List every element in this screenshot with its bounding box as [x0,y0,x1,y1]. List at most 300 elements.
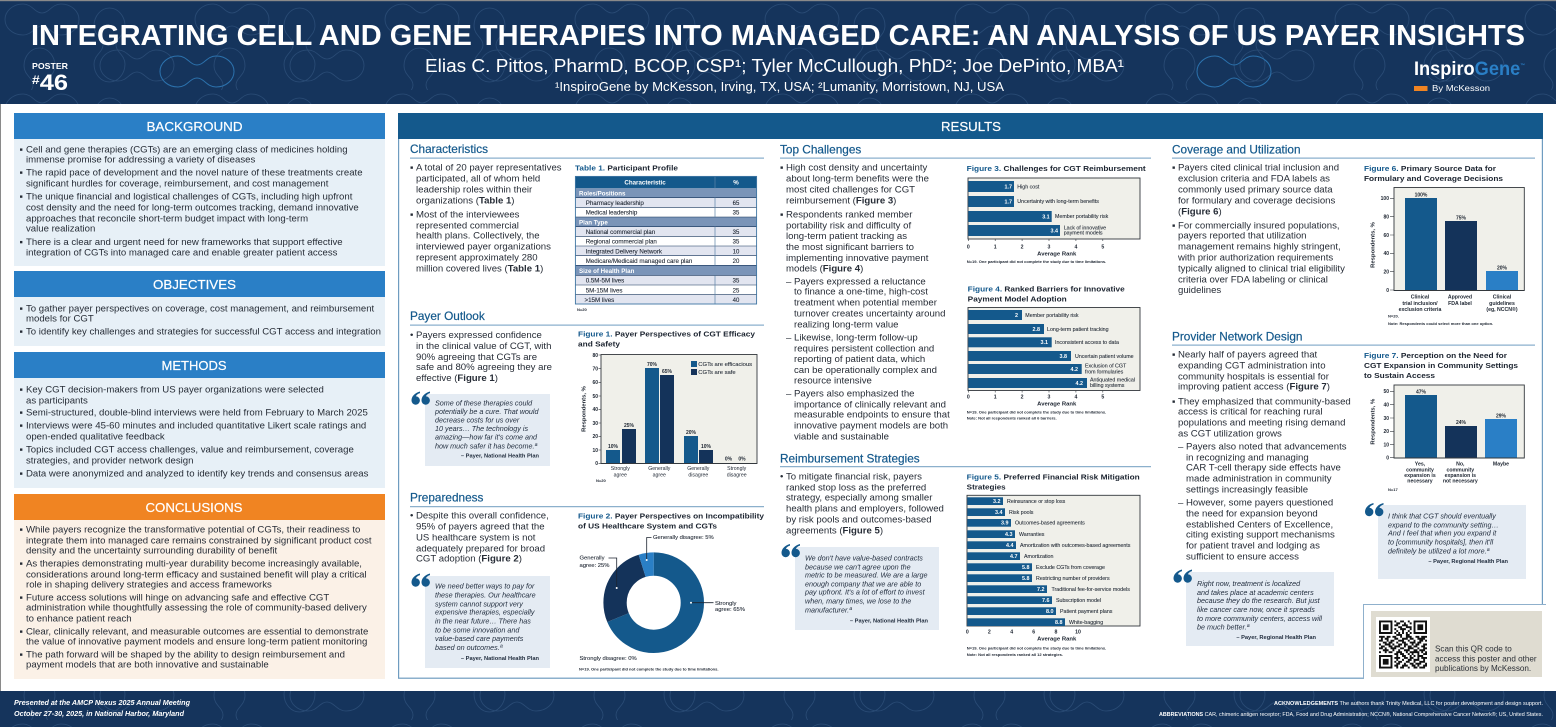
acknowledgements and abbreviations: ACKNOWLEDGEMENTS The authors thank Trinity Medical, LLC for poster development and design support. [1274,701,1543,707]
methods text: ▪ [20,469,23,480]
figure 4: barriers bar chart: 2.8 [1032,327,1040,333]
figure 5: risk mitigation bar chart: Average Rank [1037,637,1077,643]
section: top challenges: Top Challenges [780,142,861,156]
top challenges text: Payers also emphasized the [794,389,915,400]
quote: preparedness: value-based care payments [435,634,524,643]
background text: Cell and gene therapies (CGTs) are an emerging class of medicines holding [26,145,348,156]
section: payer outlook: Payer Outlook [410,309,485,323]
logo: InspiroGene by McKesson: By McKesson [1432,83,1490,93]
table 1: participant profile: 35 [733,230,740,236]
coverage text: (Figure 6) [1178,207,1222,218]
quote: provider network left: because they do the research. But just [1197,596,1321,605]
figure 4: barriers bar chart: 1 [994,395,997,401]
provider network text: They emphasized that community-based [1178,397,1351,408]
figure 4: barriers bar chart: 4 [1074,395,1077,401]
figure 4: barriers bar chart: Exclusion of CGT [1085,364,1127,370]
table 1: participant profile: Regional commercial plan [586,239,657,246]
conclusions text: ▪ [20,627,23,638]
figure 5: risk mitigation bar chart: 4.7 [1010,554,1018,560]
figure 7: community expansion bar chart: Yes, [1415,462,1426,468]
coverage text: ▪ [1172,221,1175,232]
quote: preparedness: – Payer, National Health Plan [461,656,540,662]
conclusions text: payment models that are both innovative and sustainable [26,660,269,671]
coverage text: for formulary and coverage decisions [1178,196,1336,207]
quote: reimbursement: pay upfront. It's a lot of effort to invest [804,588,926,597]
characteristics text: million covered lives (Table 1) [416,264,543,275]
coverage text: criteria over FDA labeling or clinical [1178,275,1328,286]
conclusions text: the value of innovative payment models and ensure long-term patient monitoring [26,637,367,648]
conclusions text: As therapies demonstrating multi-year durability become increasingly available, [26,559,362,570]
section: preparedness: Preparedness [410,491,484,505]
background text: approaches that reconcile short-term budget impact with long-term [26,214,308,225]
section: characteristics: Characteristics [410,142,488,156]
quote: reimbursement: when, many times, we lose to the [805,597,911,606]
quote: preparedness: based on outcomes.ª [435,643,503,652]
conclusions text: ▪ [20,525,23,536]
figure 7: community expansion bar chart: 10 [1383,442,1389,448]
provider network text: Payers also noted that advancements [1186,442,1347,453]
figure 5: risk mitigation bar chart: 7.6 [1042,598,1050,604]
coverage text: ▪ [1172,163,1175,174]
figure 6: source data bar chart [1364,164,1524,326]
figure 1: efficacy and safety bar chart: 0 [595,461,598,467]
quote: payer outlook: how much safer it has become.ª [435,442,537,451]
figure 1: efficacy and safety bar chart: 50 [592,394,598,400]
figure 1: efficacy and safety bar chart: 20 [592,434,598,440]
table 1: participant profile: 35 [733,279,740,285]
figure 7: community expansion bar chart: Figure 7. Perception on the Need for [1364,351,1507,360]
characteristics text: health plans. Collectively, the [416,231,540,242]
figure 7: community expansion bar chart: to Sustain Access [1364,371,1435,380]
conclusions text: The path forward will be shaped by the ability to design reimbursement and [26,650,345,661]
top challenges text: – [786,333,792,344]
table 1: participant profile [575,164,757,312]
quote: reimbursement: because we can't agree upon the [805,563,911,572]
figure 2: donut chart: agree: 25% [580,563,609,569]
quote: provider network right: definitely be utilized a lot more.ª [1388,547,1490,556]
figure 1: efficacy and safety bar chart: 10% [701,444,712,450]
figure 5: risk mitigation bar chart: White-bagging [1069,620,1103,626]
quote: provider network right: – Payer, Regional Health Plan [1428,559,1509,565]
figure 5: risk mitigation bar chart: N=19. One participant did not complete the study due to time limitations. [967,645,1106,650]
figure 5: risk mitigation bar chart: 5.8 [1022,565,1030,571]
quote: provider network left: – Payer, Regional Health Plan [1236,635,1317,641]
section: coverage and utilization: Coverage and Utilization [1172,142,1301,156]
top challenges text: requires persistent collection and [794,344,934,355]
characteristics text: ▪ [410,163,413,174]
figure 1: efficacy and safety bar chart: 10 [592,448,598,454]
characteristics text: A total of 20 payer representatives [416,163,562,174]
provider network text: However, some payers questioned [1186,498,1333,509]
methods text: strategies, and provider network design [26,455,193,466]
qr caption: Scan this QR code to [1435,645,1512,654]
panel: conclusions [14,494,385,679]
top challenges text: about long-term benefits were the [786,174,929,185]
preparedness text: • [410,511,413,522]
figure 1: efficacy and safety bar chart: 20% [686,430,697,436]
figure 7: community expansion bar chart [1364,351,1524,492]
provider network text: as CGT utilization grows [1178,429,1282,440]
conclusions text: administration while thoughtfully assessing the role of community-based delivery [26,603,367,614]
header banner [0,0,1556,104]
top challenges text: most cited challenges for CGT [786,185,915,196]
table 1: participant profile: 40 [733,298,740,304]
figure 2: donut chart: N=19. One participant did not complete the study due to time limitations. [579,666,719,672]
icon: qr code [1376,617,1430,672]
figure 4: barriers bar chart: from formularies [1085,370,1124,376]
methods text: open-ended qualitative feedback [26,431,165,442]
top challenges text: innovative payment models are both [794,421,948,432]
figure 7: community expansion bar chart: No, [1456,462,1465,468]
conclusions text: ▪ [20,650,23,661]
characteristics text: ▪ [410,210,413,221]
top challenges text: viable and sustainable [794,432,889,443]
figure 4: barriers bar chart: Average Rank [1037,402,1077,408]
characteristics text: represented commercial [416,221,519,232]
acknowledgements and abbreviations: ABBREVIATIONS CAR, chimeric antigen receptor; FDA, Food and Drug Administration; NCCN®, National Comprehensive Cancer Network®; US, United States. [1159,711,1543,718]
figure 7: community expansion bar chart: community [1446,468,1474,474]
affiliations: ¹InspiroGene by McKesson, Irving, TX, USA; ²Lumanity, Morristown, NJ, USA [555,79,1004,94]
figure 7: community expansion bar chart: community [1406,468,1434,474]
figure 6: source data bar chart: Clinical [1493,295,1512,301]
coverage text: Payers cited clinical trial inclusion and [1178,163,1339,174]
figure 1: efficacy and safety bar chart: 70% [647,362,658,368]
quote: provider network left: to more community centers, access will [1197,614,1322,623]
figure 1: efficacy and safety bar chart: Generally [687,466,710,472]
figure 6: source data bar chart: 100 [1381,196,1389,202]
meeting information: October 27-30, 2025, in National Harbor, Maryland [14,709,184,718]
provider network text: citing existing support mechanisms [1186,530,1335,541]
figure 4: barriers bar chart: Inconsistent access to data [1055,340,1119,346]
figure 5: risk mitigation bar chart: 5.8 [1022,576,1030,582]
logo: InspiroGene by McKesson: ™ [1520,63,1525,69]
table 1: participant profile: >15M lives [584,297,614,304]
background text: integration of CGTs into managed care and enable greater patient access [26,248,338,259]
figure 4: barriers bar chart [967,285,1140,421]
top challenges text: reimbursement (Figure 3) [786,196,896,207]
authors: Elias C. Pittos, PharmD, BCOP, CSP¹; Tyler McCullough, PhD²; Joe DePinto, MBA¹ [425,56,1124,76]
provider network text: CAR T-cell therapy side effects have [1186,463,1341,474]
provider network text: expanding CGT administration into [1178,361,1326,372]
figure 5: risk mitigation bar chart [966,473,1140,657]
table 1: participant profile: 5M-15M lives [586,287,622,294]
quote: reimbursement: We don't have value-based contracts [805,554,923,563]
figure 5: risk mitigation bar chart: Amortization with outcomes-based agreements [1020,543,1131,549]
figure 2: donut chart: Generally disagree: 5% [653,535,714,541]
top challenges text: resource intensive [794,376,872,387]
figure 6: source data bar chart: Note: Respondents could select more than one option. [1388,321,1493,326]
panel: results frame and banner [398,113,1543,678]
provider network text: the need for expansion beyond [1186,509,1318,520]
table 1: participant profile: Integrated Delivery Network [586,248,663,255]
top challenges text: reporting of patient data, which [794,354,925,365]
quote: payer outlook [412,392,550,466]
figure 5: risk mitigation bar chart: 8 [1055,630,1058,636]
quote: provider network right: to [community hospitals], then it'll [1388,538,1494,547]
quote: payer outlook: Some of these therapies could [435,399,533,408]
background text: There is a clear and urgent need for new frameworks that support effective [26,237,343,248]
panel: methods: METHODS [162,359,226,373]
figure 4: barriers bar chart: 5 [1101,395,1104,401]
provider network text: community hospitals is essential for [1178,372,1330,383]
figure 3: challenges bar chart: 3 [1048,245,1051,251]
figure 2: donut chart: Strongly disagree: 0% [580,656,637,662]
quote: provider network left: like cancer care now, once it spreads [1197,605,1315,614]
coverage text: For commercially insured populations, [1178,221,1340,232]
figure 4: barriers bar chart: 3.1 [1040,340,1048,346]
top challenges text: measurable endpoints to ensure that [794,410,950,421]
table 1: participant profile: Medicare/Medicaid managed care plan [586,258,693,265]
quote: payer outlook: 10 years… The technology is [435,424,528,433]
conclusions text: Future access solutions will hinge on advancing safe and effective CGT [26,593,329,604]
objectives text: ▪ [20,327,23,338]
top challenges text: Payers expressed a reluctance [794,277,926,288]
top challenges text: ▪ [780,210,783,221]
figure 3: challenges bar chart: 4 [1074,245,1077,251]
figure 6: source data bar chart: Figure 6. Primary Source Data for [1364,164,1496,173]
methods text: ▪ [20,408,23,419]
top challenges text: models (Figure 4) [786,264,863,275]
table 1: participant profile: N=20 [577,307,588,312]
figure 6: source data bar chart: 60 [1383,233,1389,239]
figure 6: source data bar chart: Approved [1448,295,1472,301]
table 1: participant profile: Table 1. Participant Profile [575,164,679,173]
quote: preparedness [412,574,550,668]
figure 6: source data bar chart: FDA label [1448,301,1472,307]
logo: InspiroGene by McKesson: InspiroGene [1414,59,1522,80]
panel: conclusions: CONCLUSIONS [146,501,242,515]
figure 3: challenges bar chart: Member portability risk [1055,214,1109,220]
quote: preparedness: in the near future… There has [435,617,531,626]
figure 7: community expansion bar chart: Maybe [1493,462,1509,468]
figure 6: source data bar chart: Clinical [1411,295,1430,301]
title: INTEGRATING CELL AND GENE THERAPIES INTO MANAGED CARE: AN ANALYSIS OF US PAYER INSIGHTS [31,20,1525,52]
logo: InspiroGene by McKesson [1414,59,1525,93]
figure 5: risk mitigation bar chart: 8.0 [1046,609,1054,615]
figure 1: efficacy and safety bar chart: 30 [592,421,598,427]
methods text: Topics included CGT access challenges, value and reimbursement, coverage [26,444,354,455]
top challenges text: realizing long-term value [794,320,899,331]
quote: reimbursement: manufacturer.ª [805,606,852,615]
figure 4: barriers bar chart: billing systems [1090,383,1125,389]
quote: reimbursement: – Payer, National Health Plan [850,619,929,625]
figure 4: barriers bar chart: Figure 4. Ranked Barriers for Innovative [968,285,1125,294]
figure 3: challenges bar chart: 1.7 [1004,184,1012,190]
figure 4: barriers bar chart: 0 [967,395,970,401]
background text: ▪ [20,192,23,203]
figure 5: risk mitigation bar chart: Outcomes-based agreements [1015,521,1085,527]
coverage text: typically aligned to clinical trial eligibility [1178,264,1345,275]
figure 6: source data bar chart: 75% [1456,216,1467,222]
figure 1: efficacy and safety bar chart: 80 [592,353,598,359]
figure 4: barriers bar chart: Uncertain patient volume [1075,354,1134,360]
figure 5: risk mitigation bar chart: 10 [1075,630,1081,636]
table 1: participant profile: 20 [733,259,740,265]
figure 3: challenges bar chart: 2 [1021,245,1024,251]
figure 5: risk mitigation bar chart: Strategies [967,483,1006,492]
objectives text: models for CGT [26,314,94,325]
background text: cost density and the need for long-term outcomes tracking, demand innovative [26,203,359,214]
figure 5: risk mitigation bar chart: Reinsurance or stop loss [1007,499,1066,505]
figure 7: community expansion bar chart: necessary [1407,479,1433,485]
figure 7: community expansion bar chart: 20 [1383,429,1389,435]
methods text: ▪ [20,444,23,455]
figure 6: source data bar chart: Respondents, % [1370,221,1376,268]
preparedness text: CGT adoption (Figure 2) [416,554,522,565]
provider network text: populations and meeting rising demand [1178,418,1345,429]
table 1: participant profile: Size of Health Plan [579,268,635,275]
coverage text: guidelines [1178,285,1221,296]
figure 1: efficacy and safety bar chart: 0% [738,456,746,462]
methods text: ▪ [20,385,23,396]
reimbursement text: To mitigate financial risk, payers [786,472,922,483]
payer outlook text: in the clinical value of CGT, with [416,341,551,352]
background text: value realization [26,224,95,235]
figure 5: risk mitigation bar chart: Restricting number of providers [1036,576,1110,582]
panel: results frame and banner: RESULTS [941,120,1001,134]
figure 6: source data bar chart: 80 [1383,214,1389,220]
figure 3: challenges bar chart: Uncertainty with long-term benefits [1017,199,1099,205]
figure 5: risk mitigation bar chart: 4.4 [1006,543,1014,549]
conclusions text: role in shaping delivery strategies and access frameworks [26,580,272,591]
reimbursement text: ranked stop loss as the preferred [786,483,926,494]
figure 1: efficacy and safety bar chart: 65% [662,369,673,375]
figure 5: risk mitigation bar chart: Figure 5. Preferred Financial Risk Mitigation [967,473,1140,482]
quote: payer outlook: potentially be a cure. That would [434,407,539,416]
figure 5: risk mitigation bar chart: Amortization [1024,554,1053,560]
reimbursement text: agreements (Figure 5) [786,526,883,537]
figure 4: barriers bar chart: Antiquated medical [1090,378,1135,384]
figure 4: barriers bar chart: 2 [1015,313,1018,319]
section: characteristics [410,142,764,275]
provider network text: – [1178,442,1184,453]
table 1: participant profile: 10 [733,249,740,255]
figure 1: efficacy and safety bar chart: 10% [608,444,619,450]
top challenges text: Respondents ranked member [786,210,913,221]
methods text: Interviews were 45-60 minutes and included quantitative Likert scale ratings and [26,420,366,431]
figure 3: challenges bar chart: Average Rank [1037,252,1077,258]
figure 6: source data bar chart: (eg, NCCN®) [1486,306,1518,313]
figure 1: efficacy and safety bar chart: and Safety [578,340,621,349]
top challenges text: long-term patient tracking as [786,231,907,242]
figure 2: donut chart: Generally [580,556,605,562]
figure 5: risk mitigation bar chart: 6 [1032,630,1035,636]
figure 6: source data bar chart: exclusion criteria [1399,307,1441,313]
payer outlook text: Payers expressed confidence [416,330,542,341]
figure 4: barriers bar chart: 2 [1021,395,1024,401]
figure 4: barriers bar chart: Payment Model Adoption [968,295,1067,304]
figure 5: risk mitigation bar chart: 7.2 [1037,587,1044,593]
poster number [32,61,68,95]
background text: significant hurdles for coverage, reimbursement, and cost management [26,179,329,190]
coverage text: payers reported that utilization [1178,231,1307,242]
figure 1: efficacy and safety bar chart: 60 [592,380,598,386]
reimbursement text: by risk pools and outcomes-based [786,515,932,526]
figure 4: barriers bar chart: N=19. One participant did not complete the study due to time limitations. [967,410,1106,415]
figure 7: community expansion bar chart: Respondents, % [1370,398,1376,445]
figure 6: source data bar chart: 100% [1415,192,1428,198]
panel: background [14,113,385,266]
figure 6: source data bar chart: 20% [1497,266,1508,272]
payer outlook text: • [410,330,413,341]
figure 5: risk mitigation bar chart: Traditional fee-for-service models [1052,587,1130,593]
coverage text: commonly used primary source data [1178,185,1333,196]
coverage text: management remains highly stringent, [1178,242,1341,253]
figure 7: community expansion bar chart: 47% [1416,390,1427,396]
quote: provider network left: be much better.ª [1197,622,1250,631]
section: reimbursement strategies [780,451,1151,537]
figure 1: efficacy and safety bar chart: 25% [624,423,635,429]
conclusions text: density and the uncertainty surrounding durability of benefit [26,546,278,557]
quote: provider network left: and takes place at academic centers [1197,588,1314,597]
conclusions text: While payers recognize the transformative potential of CGTs, their readiness to [26,525,360,536]
quote: reimbursement: enough company that we are able to [805,580,921,589]
characteristics text: interviewed payer organizations [416,242,551,253]
quote: preparedness: to be some innovation and [435,626,520,635]
background text: ▪ [20,237,23,248]
figure 1: efficacy and safety bar chart: Strongly [611,466,630,472]
figure 1: efficacy and safety bar chart: Respondents, % [582,385,588,432]
provider network text: in recognizing and managing [1186,453,1309,464]
coverage text: with prior authorization requirements [1177,253,1333,264]
figure 1: efficacy and safety bar chart: disagree [688,472,708,478]
figure 4: barriers bar chart: Member portability risk [1025,313,1079,319]
provider network text: Nearly half of payers agreed that [1178,350,1318,361]
reimbursement text: health plans and employers, followed [786,504,944,515]
figure 6: source data bar chart: trial inclusion/ [1402,301,1438,307]
conclusions text: ▪ [20,593,23,604]
top challenges text: High cost density and uncertainty [786,163,928,174]
top challenges text: – [786,389,792,400]
figure 5: risk mitigation bar chart: 4.3 [1005,532,1012,538]
top challenges text: turnover creates uncertainty around [794,309,945,320]
figure 3: challenges bar chart: 5 [1101,245,1104,251]
quote: preparedness: expensive therapies, especially [435,608,535,617]
quote: provider network right: And I feel that when you expand it [1387,529,1497,538]
poster number: 46 [40,70,68,95]
provider network text: established Centers of Excellence, [1186,520,1333,531]
section: coverage and utilization [1172,142,1535,296]
figure 5: risk mitigation bar chart: Risk pools [1009,510,1034,516]
figure 6: source data bar chart: 0 [1386,288,1389,294]
figure 7: community expansion bar chart: 30 [1383,416,1389,422]
background text: The unique financial and logistical challenges of CGTs, including high upfront [26,192,353,203]
table 1: participant profile: Pharmacy leadership [586,200,644,207]
methods text: ▪ [20,420,23,431]
figure 7: community expansion bar chart: expansion is [1445,473,1476,479]
figure 7: community expansion bar chart: not necessary [1443,479,1478,485]
figure 4: barriers bar chart: Note: Not all respondents ranked all 6 barriers. [967,416,1057,421]
figure 1: efficacy and safety bar chart: agree [653,472,666,478]
figure 3: challenges bar chart: N=19. One participant did not complete the study due to time limitations. [967,259,1106,264]
figure 5: risk mitigation bar chart: 3.9 [1001,521,1008,527]
figure 5: risk mitigation bar chart: Patient payment plans [1060,609,1113,615]
top challenges text: – [786,277,792,288]
methods text: as participants [26,396,88,407]
table 1: participant profile: 35 [733,240,740,246]
top challenges text: portability risk and difficulty of [786,221,911,232]
figure 1: efficacy and safety bar chart: Generally [648,466,671,472]
provider network text: – [1178,498,1184,509]
figure 4: barriers bar chart: 3.8 [1060,354,1067,360]
characteristics text: represent approximately 280 [416,253,538,264]
provider network text: sufficient to ensure access [1186,552,1299,563]
table 1: participant profile: Medical leadership [586,210,638,217]
quote: preparedness: system cannot support very [435,600,523,609]
methods text: Semi-structured, double-blind interviews were held from February to March 2025 [26,408,368,419]
figure 3: challenges bar chart: 3.1 [1042,214,1050,220]
figure 5: risk mitigation bar chart: Note: Not all respondents ranked all 12 strategies. [967,652,1063,657]
